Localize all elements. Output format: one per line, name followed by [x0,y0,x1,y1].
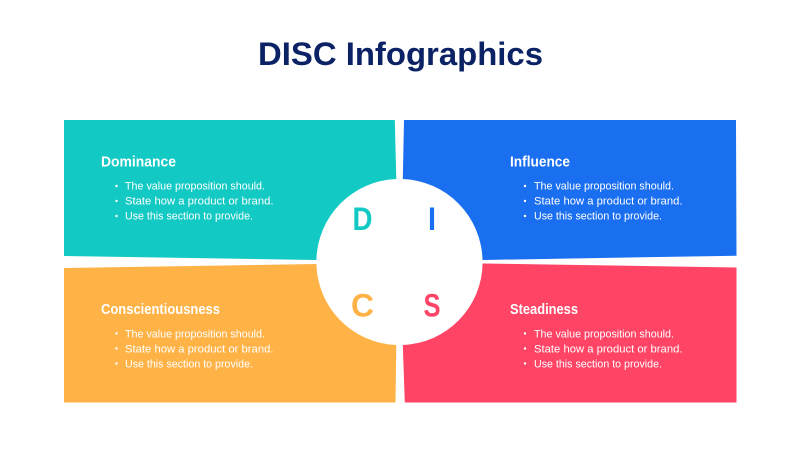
bullet list: Dominance [115,181,274,223]
bullet list: Influence: State how a product or brand. [534,196,682,208]
heading: Dominance: Dominance [101,155,176,171]
panel: Influence [403,120,736,260]
bullet list: Dominance: State how a product or brand. [125,196,274,208]
panel shape: Influence [403,120,736,260]
bullet list: Conscientiousness [115,328,274,370]
letter C: C [351,288,374,324]
heading: Steadiness: Steadiness [510,302,578,318]
bullet list: Steadiness: The value proposition should. [534,328,674,340]
bullet list: Conscientiousness: The value proposition should. [125,328,265,340]
panel: Dominance [64,120,396,260]
bullet list: Steadiness: State how a product or brand. [534,343,682,355]
panel: Conscientiousness [64,264,396,402]
letter I: I [428,201,436,237]
panel shape: Dominance [64,120,396,260]
letter S: S [424,288,440,324]
bullet list: Dominance: The value proposition should. [125,181,265,193]
title: DISC Infographics [258,36,543,72]
letter D: D [352,201,372,237]
bullet list: Steadiness: Use this section to provide. [534,358,662,370]
bullet list: Influence: Use this section to provide. [534,211,662,223]
heading: Conscientiousness: Conscientiousness [101,302,220,318]
panel shape: Steadiness [403,264,736,402]
bullet list: Influence [524,181,682,223]
bullet list: Conscientiousness: State how a product or brand. [125,343,274,355]
heading: Influence: Influence [510,155,570,171]
panel: Steadiness [403,264,736,402]
bullet list: Influence: The value proposition should. [534,181,674,193]
bullet list: Dominance: Use this section to provide. [125,211,253,223]
bullet list: Conscientiousness: Use this section to provide. [125,358,253,370]
bullet list: Steadiness [524,328,682,370]
panel shape: Conscientiousness [64,264,396,402]
